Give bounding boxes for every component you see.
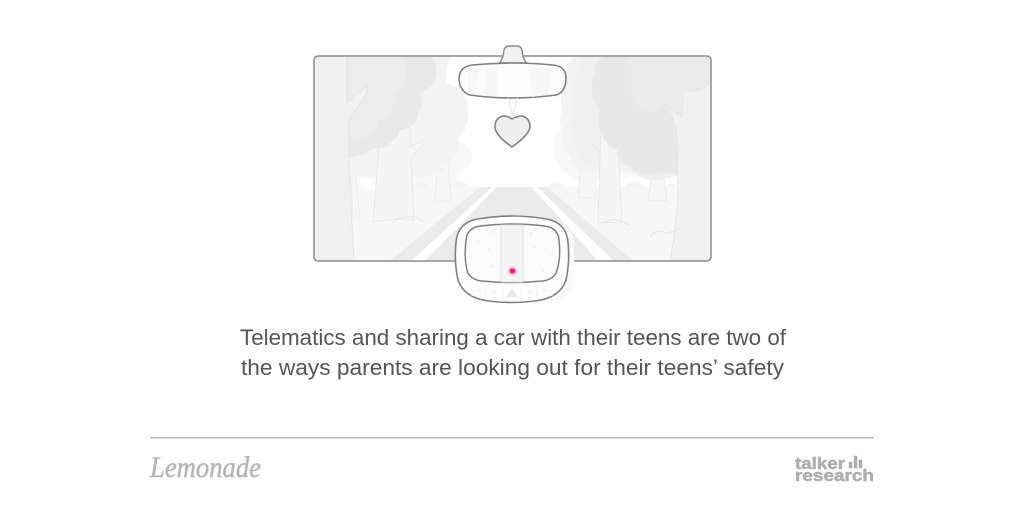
left background trees bbox=[350, 164, 470, 218]
pink indicator light bbox=[506, 265, 518, 277]
screen centre strip bbox=[501, 225, 523, 282]
left middle trunk bbox=[373, 120, 423, 222]
caption bbox=[240, 325, 787, 380]
road lane lines bbox=[411, 187, 497, 261]
right upper canopy bbox=[690, 56, 710, 90]
footer rule bbox=[150, 437, 874, 438]
right light tree canopy bbox=[560, 57, 596, 174]
icon: heart bbox=[495, 116, 530, 147]
road bbox=[390, 187, 633, 261]
heart charm string bbox=[508, 98, 517, 116]
buttons row bbox=[472, 284, 552, 301]
device body bbox=[455, 216, 569, 302]
right dark canopy bbox=[602, 104, 677, 165]
screen dots bbox=[477, 231, 553, 271]
caption: Telematics and sharing a car with their teens are two of bbox=[240, 325, 787, 350]
left dark canopy bbox=[345, 56, 437, 157]
mirror body bbox=[459, 63, 566, 98]
windshield scene bbox=[314, 56, 711, 261]
logo: talker research: talker bbox=[795, 454, 845, 473]
right middle trunk bbox=[598, 125, 622, 223]
ground bbox=[314, 187, 711, 261]
device shadow bbox=[505, 222, 574, 301]
right foreground trunk bbox=[667, 81, 710, 260]
illustration: windshield view bbox=[314, 46, 711, 302]
mirror mount bbox=[499, 46, 527, 63]
right background trees bbox=[553, 130, 640, 180]
logo: talker research bbox=[795, 454, 874, 485]
rear-view mirror bbox=[459, 46, 566, 98]
left foreground trunk bbox=[315, 57, 354, 260]
right small trunks bbox=[578, 168, 596, 198]
left light tree canopy bbox=[345, 56, 468, 177]
caption: the ways parents are looking out for their teens’ safety bbox=[241, 355, 784, 380]
right far canopy bbox=[634, 172, 677, 180]
logo: Lemonade: Lemonade bbox=[149, 451, 261, 484]
windshield frame bbox=[314, 56, 711, 261]
left upper canopy bbox=[345, 56, 406, 140]
device screen bbox=[465, 224, 560, 282]
telematics device bbox=[455, 216, 574, 302]
logo: talker research: research bbox=[795, 466, 874, 485]
